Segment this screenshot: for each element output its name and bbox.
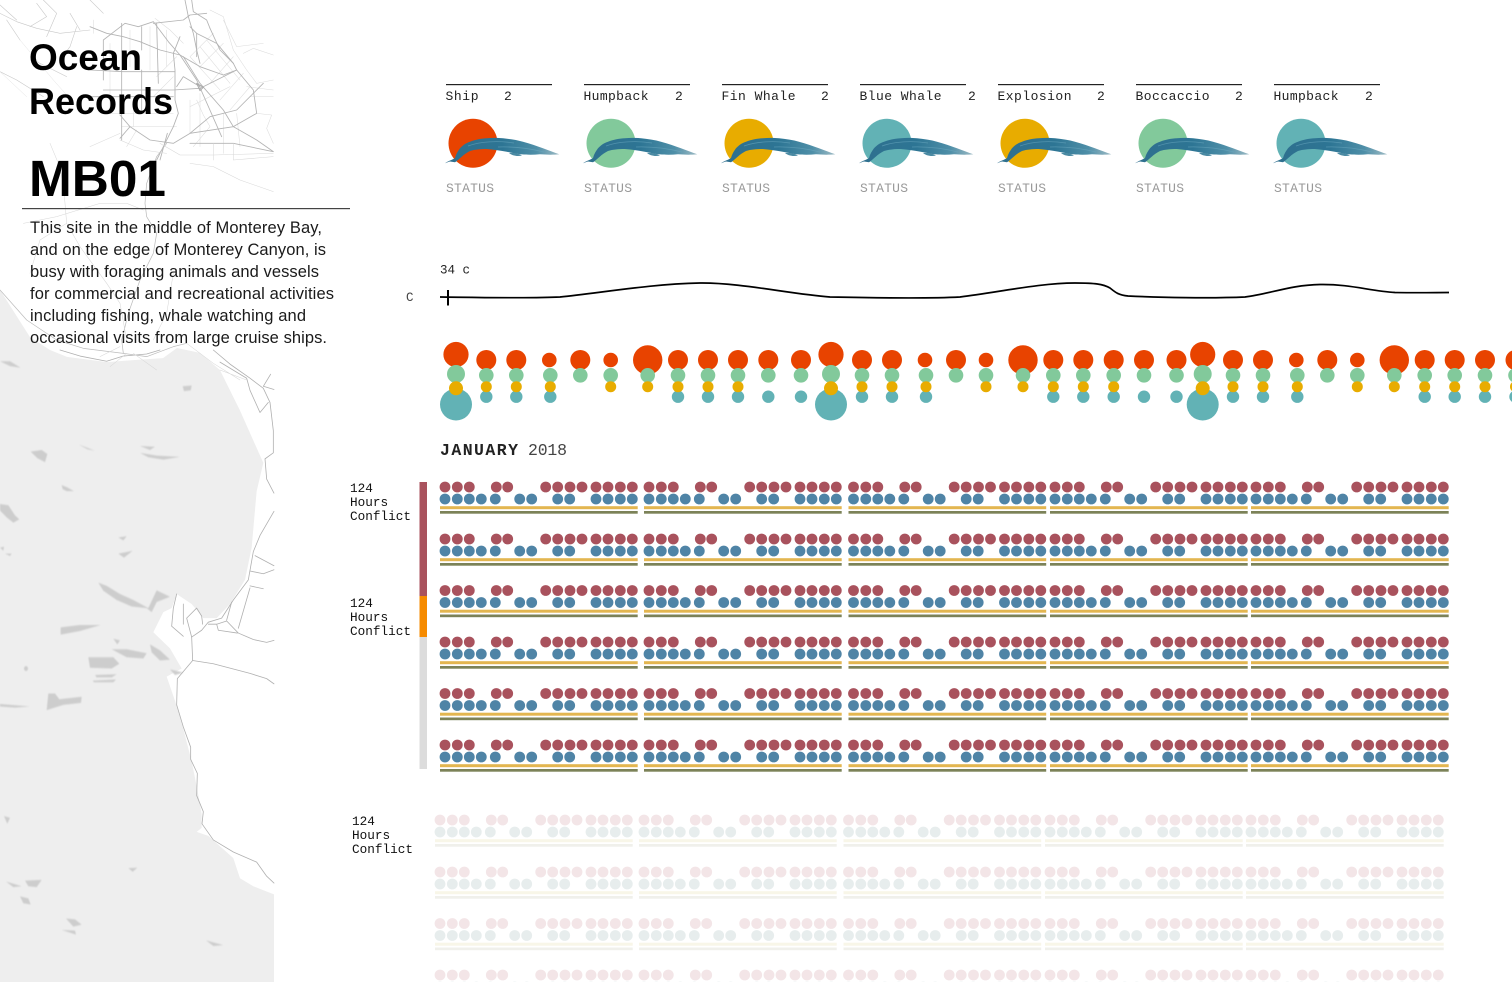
card: Humpback 2: STATUS xyxy=(1274,181,1322,196)
card: Explosion: Explosion xyxy=(998,89,1072,104)
label: hours conflict 3: Conflict xyxy=(352,842,413,857)
card: Explosion: STATUS xyxy=(998,181,1046,196)
card: Humpback 2: 2 xyxy=(1365,89,1373,104)
card: Boccaccio: 2 xyxy=(1235,89,1243,104)
faded hourly dot matrix xyxy=(435,815,1444,982)
card: Blue Whale: Blue Whale xyxy=(860,89,942,104)
card: Ship: STATUS xyxy=(446,181,494,196)
label: hours conflict 1: Conflict xyxy=(350,509,411,524)
text block: site description: and on the edge of Monterey Canyon, is xyxy=(30,241,326,259)
card: Humpback xyxy=(583,84,697,196)
map: ocean bathymetry and coast xyxy=(0,290,274,982)
label: hours conflict 2: Conflict xyxy=(350,624,411,639)
label: hours conflict 3: Hours xyxy=(352,828,390,843)
label: hours conflict 2 xyxy=(350,596,411,639)
card: Fin Whale: 2 xyxy=(821,89,829,104)
title xyxy=(29,37,173,122)
card: Humpback: STATUS xyxy=(584,181,632,196)
label: hours conflict 2: 124 xyxy=(350,596,373,611)
heading: month: 2018 xyxy=(528,441,567,460)
card: Humpback: 2 xyxy=(675,89,683,104)
card: Humpback: Humpback xyxy=(584,89,649,104)
label: hours conflict 2: Hours xyxy=(350,610,388,625)
heading: site code: MB01 xyxy=(29,150,166,207)
card: Boccaccio: Boccaccio xyxy=(1136,89,1210,104)
text block: site description: including fishing, whale watching and xyxy=(30,307,306,325)
card: Fin Whale: Fin Whale xyxy=(722,89,796,104)
temperature line chart: 34 c xyxy=(440,264,470,278)
label: hours conflict 1: Hours xyxy=(350,495,388,510)
title: Ocean xyxy=(29,37,142,78)
temperature line chart: C xyxy=(406,291,414,305)
stacked vertical bar xyxy=(420,482,427,769)
text block: site description: for commercial and recreational activities xyxy=(30,285,334,303)
card: Humpback 2 xyxy=(1273,84,1387,196)
text block: site description: occasional visits from large cruise ships. xyxy=(30,329,327,347)
map: road network xyxy=(0,0,273,380)
label: hours conflict 1: 124 xyxy=(350,481,373,496)
species legend cards xyxy=(445,84,1387,196)
text block: site description: This site in the middle of Monterey Bay, xyxy=(30,219,322,237)
card: Fin Whale: STATUS xyxy=(722,181,770,196)
card: Boccaccio: STATUS xyxy=(1136,181,1184,196)
label: hours conflict 3 xyxy=(352,814,413,857)
heading: month: JANUARY xyxy=(440,441,518,460)
card: Blue Whale: 2 xyxy=(968,89,976,104)
card: Boccaccio xyxy=(1135,84,1249,196)
text block: site description xyxy=(30,219,334,347)
card: Blue Whale: STATUS xyxy=(860,181,908,196)
card: Ship: Ship xyxy=(446,89,478,104)
card: Blue Whale xyxy=(859,84,976,196)
card: Ship: 2 xyxy=(504,89,512,104)
card: Explosion: 2 xyxy=(1097,89,1105,104)
title: Records xyxy=(29,81,173,122)
hourly dot matrix xyxy=(440,482,1449,772)
card: Ship xyxy=(445,84,559,196)
card: Humpback 2: Humpback xyxy=(1274,89,1339,104)
temperature line chart xyxy=(406,264,1449,306)
heading: month xyxy=(440,441,567,460)
card: Fin Whale xyxy=(721,84,835,196)
text block: site description: busy with foraging animals and vessels xyxy=(30,263,319,281)
card: Explosion xyxy=(997,84,1111,196)
label: hours conflict 3: 124 xyxy=(352,814,375,829)
bubble timeline: daily species detections xyxy=(440,342,1512,420)
label: hours conflict 1 xyxy=(350,481,411,524)
